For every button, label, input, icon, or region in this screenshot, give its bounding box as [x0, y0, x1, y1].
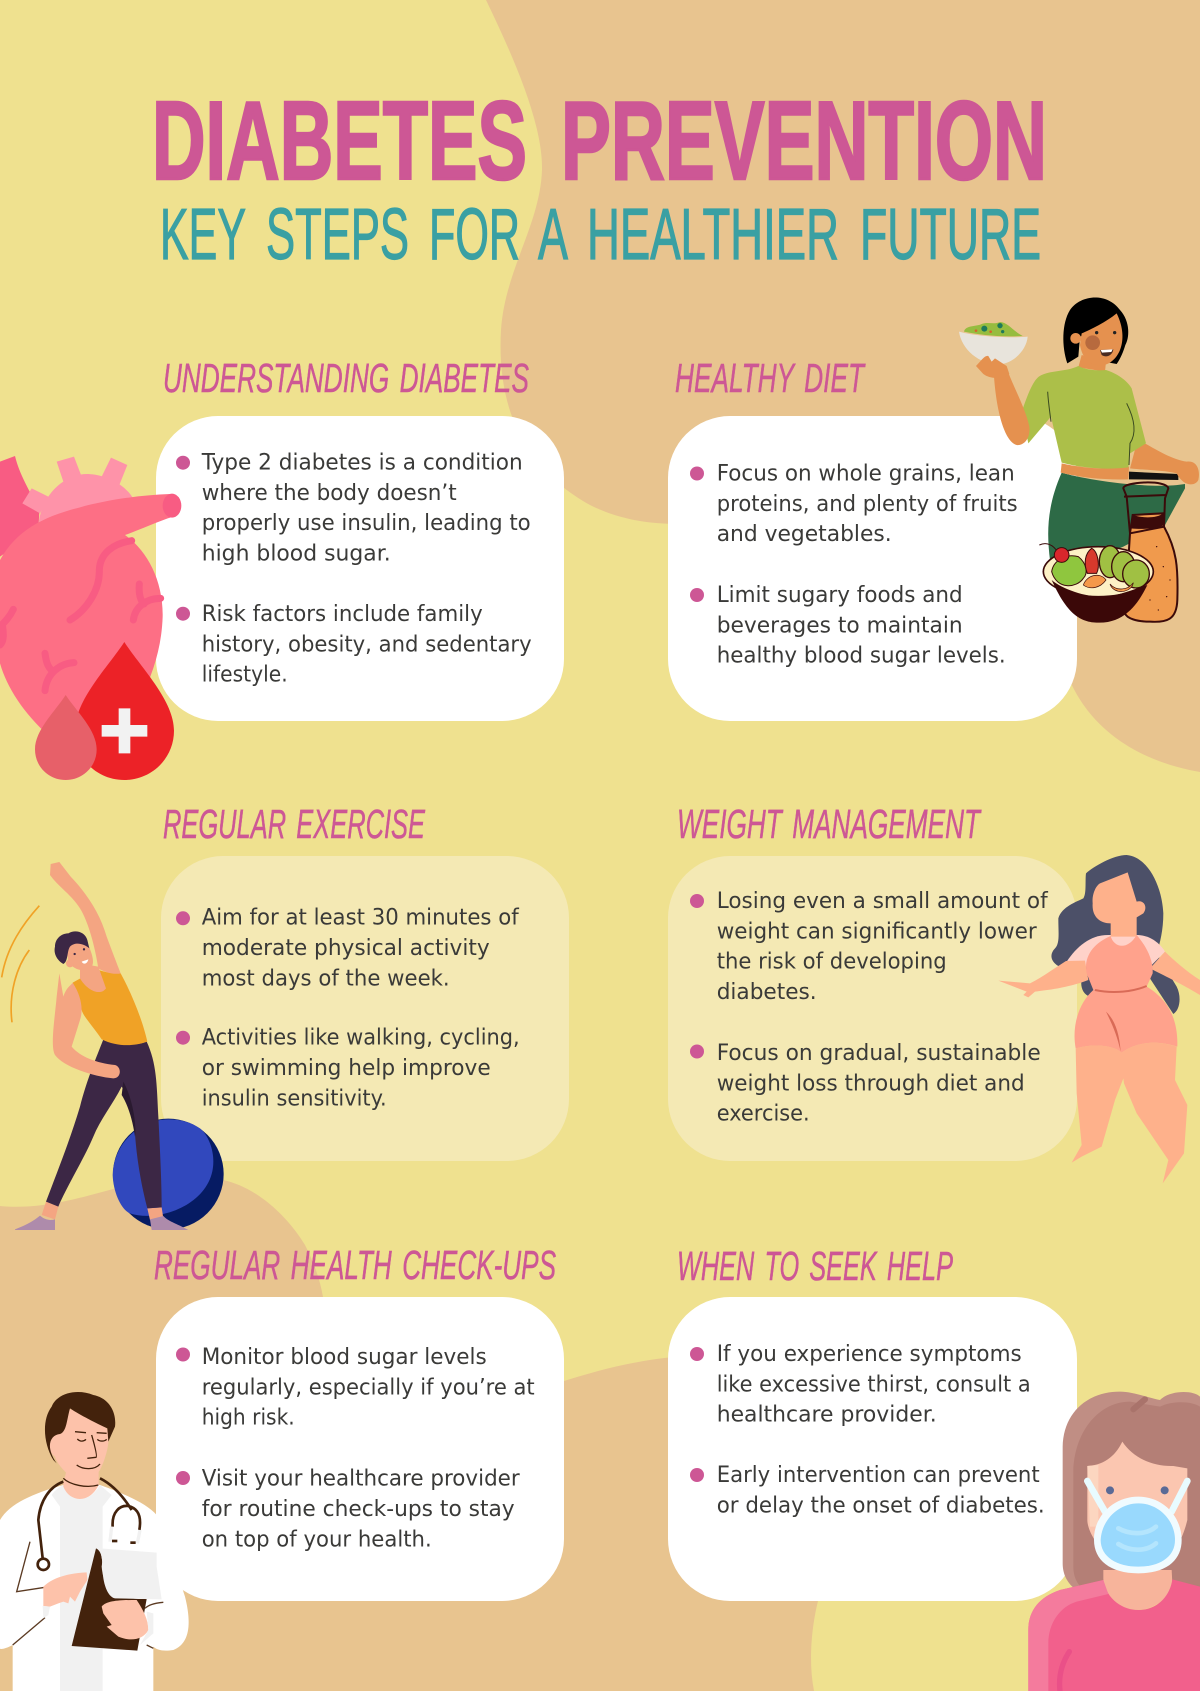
body text: Risk factors include family [202, 602, 483, 627]
bullets [690, 1347, 704, 1482]
body text: Early intervention can prevent [717, 1463, 1040, 1488]
body text: Focus on whole grains, lean [717, 462, 1015, 486]
icon: woman in pink outfit [998, 855, 1200, 1183]
body text: where the body doesn’t [202, 481, 457, 506]
body text: moderate physical activity [202, 936, 490, 961]
body text: high risk. [202, 1406, 295, 1431]
body text: Losing even a small amount of [717, 889, 1049, 914]
card background [156, 1297, 564, 1601]
body text: for routine check-ups to stay [202, 1497, 515, 1522]
background blob: upper right [486, 0, 1200, 772]
heading: regular exercise: REGULAR EXERCISE [163, 801, 425, 847]
body text [201, 450, 532, 688]
bullets [690, 894, 704, 1058]
icon: heart with blood drops [0, 456, 181, 780]
body text: history, obesity, and sedentary [202, 632, 532, 657]
body text: regularly, especially if you’re at [202, 1375, 535, 1400]
panel: when to seek help [668, 1243, 1077, 1601]
heading: healthy diet: HEALTHY DIET [675, 355, 866, 401]
body text: and vegetables. [717, 522, 892, 547]
body text [717, 462, 1018, 669]
body text: healthy blood sugar levels. [717, 644, 1006, 669]
panel: regular exercise [161, 801, 569, 1161]
body text: the risk of developing [717, 950, 947, 975]
body text: most days of the week. [202, 966, 450, 992]
body text: insulin sensitivity. [202, 1086, 387, 1112]
subtitle: HEALTHIER [587, 195, 839, 275]
card background [668, 856, 1077, 1161]
card background [668, 416, 1077, 721]
body text: like excessive thirst, consult a [717, 1372, 1031, 1397]
body text: beverages to maintain [717, 613, 963, 638]
card background [156, 416, 564, 721]
bullets [690, 466, 704, 602]
title: DIABETES [152, 79, 527, 203]
panel: healthy diet [668, 355, 1077, 721]
bullets [176, 1348, 190, 1485]
body text: Focus on gradual, sustainable [717, 1041, 1041, 1066]
body text: Aim for at least 30 minutes of [202, 906, 520, 930]
heading: understanding diabetes: UNDERSTANDING DIABETES [163, 355, 529, 401]
icon: woman with healthy food [959, 297, 1199, 623]
body text: high blood sugar. [202, 541, 391, 566]
subtitle: KEY [160, 195, 246, 275]
body text: Visit your healthcare provider [202, 1466, 521, 1492]
subtitle: STEPS [266, 195, 409, 275]
body text [717, 1342, 1045, 1518]
icon: man stretching with exercise ball [2, 862, 224, 1230]
subtitle: FUTURE [860, 195, 1041, 275]
body text: healthcare provider. [717, 1403, 937, 1428]
card background [668, 1297, 1077, 1601]
subtitle [160, 195, 1041, 275]
body text: weight loss through diet and [717, 1071, 1025, 1096]
body text [202, 1345, 535, 1552]
bullets [176, 456, 190, 621]
subtitle: FOR [429, 195, 520, 275]
panel: weight management [668, 801, 1077, 1161]
body text: If you experience symptoms [717, 1342, 1022, 1367]
heading: weight management: WEIGHT MANAGEMENT [677, 801, 982, 847]
subtitle: A [538, 195, 568, 275]
icon: woman wearing face mask [1028, 1392, 1200, 1691]
card background [161, 856, 569, 1161]
body text: Activities like walking, cycling, [202, 1026, 520, 1050]
body text: Type 2 diabetes is a condition [201, 450, 523, 476]
body text: proteins, and plenty of fruits [717, 492, 1018, 517]
body text [202, 906, 520, 1112]
heading: when to seek help: WHEN TO SEEK HELP [677, 1243, 953, 1289]
icon: doctor with clipboard [0, 1392, 189, 1691]
panel: understanding diabetes [156, 355, 564, 721]
bullets [176, 911, 190, 1045]
body text: or delay the onset of diabetes. [717, 1493, 1045, 1518]
heading: regular health check-ups: REGULAR HEALTH CHECK-UPS [154, 1242, 556, 1288]
body text [717, 889, 1049, 1127]
body text: Limit sugary foods and [717, 583, 963, 608]
body text: weight can significantly lower [717, 919, 1038, 944]
body text: exercise. [717, 1102, 810, 1127]
body text: on top of your health. [202, 1528, 432, 1552]
body text: properly use insulin, leading to [202, 511, 531, 536]
body text: lifestyle. [202, 663, 288, 688]
body text: Monitor blood sugar levels [202, 1345, 487, 1370]
panel: regular health check-ups [154, 1242, 564, 1601]
body text: diabetes. [717, 980, 817, 1005]
background blob: bottom [0, 1178, 818, 1691]
body text: or swimming help improve [202, 1056, 491, 1081]
title [152, 79, 1047, 203]
